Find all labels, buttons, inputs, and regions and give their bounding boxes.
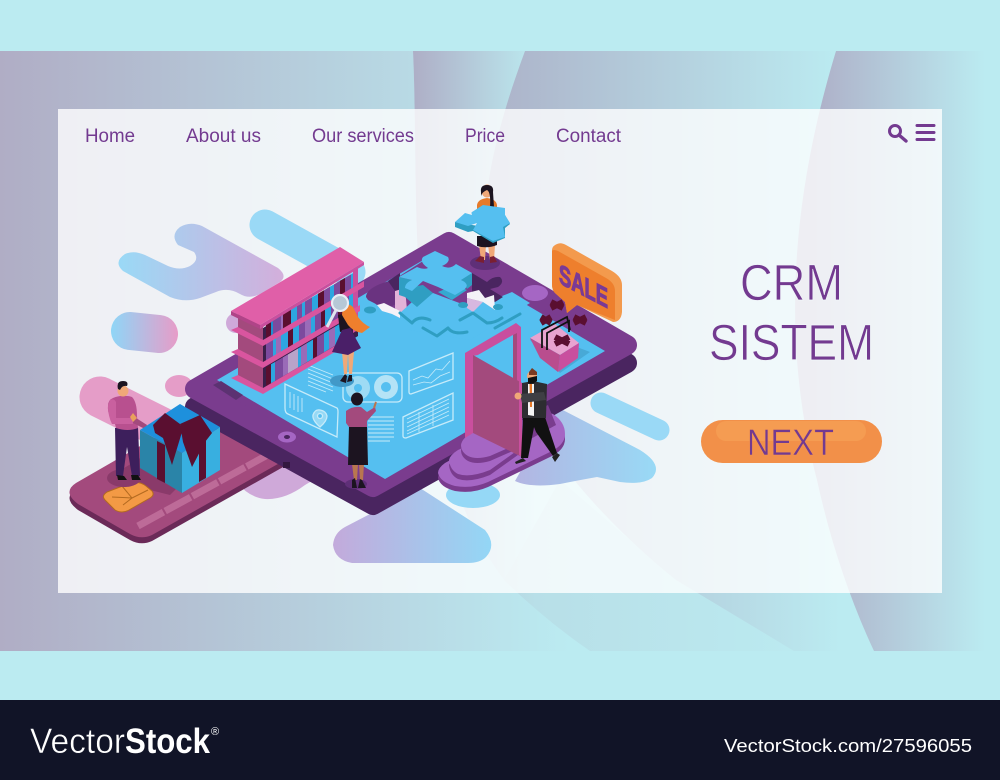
panel: landing page card xyxy=(58,109,942,593)
door panel xyxy=(473,355,522,457)
navigation menu: Home xyxy=(85,126,135,147)
purple left piece xyxy=(366,281,396,309)
tablet screen xyxy=(217,252,605,479)
image id: VectorStock.com/27596055 xyxy=(724,735,972,756)
basket interior xyxy=(530,324,579,355)
shelf side panel xyxy=(238,314,263,392)
missing piece floor xyxy=(367,252,512,313)
list lines xyxy=(368,417,394,441)
dark hole left xyxy=(388,273,400,291)
card slot xyxy=(283,462,290,468)
person: woman with magnifier xyxy=(327,295,370,387)
basket right wall xyxy=(558,343,579,372)
puzzle area xyxy=(364,251,548,340)
headline xyxy=(709,254,874,371)
puzzle seams xyxy=(400,313,520,336)
icon: search xyxy=(890,126,906,141)
person: man with gift xyxy=(107,381,147,487)
sale speech bubble xyxy=(552,243,622,322)
white strip xyxy=(377,303,400,318)
basket handles xyxy=(542,317,570,350)
person: woman with black skirt xyxy=(345,392,376,489)
shelf boards xyxy=(231,281,364,346)
navigation menu: Our services xyxy=(312,126,414,147)
basket item xyxy=(555,337,569,344)
gauges card xyxy=(343,373,402,402)
gift box xyxy=(140,404,220,493)
navigation menu: About us xyxy=(186,126,261,147)
navigation menu: Price xyxy=(465,126,505,147)
navigation menu: Contact xyxy=(556,126,622,147)
basket with crosses xyxy=(530,302,590,373)
books row 3 xyxy=(266,320,346,386)
raised piece side xyxy=(399,273,472,307)
pink wall xyxy=(395,288,407,315)
headline: CRM xyxy=(740,254,843,311)
decorative background blobs xyxy=(100,224,659,563)
ui circle xyxy=(522,285,548,301)
blue screen patches xyxy=(400,292,530,340)
card chip xyxy=(103,482,153,512)
shelf shadow xyxy=(213,381,243,400)
dark hole right xyxy=(472,273,503,302)
table card xyxy=(403,393,453,438)
footer bar xyxy=(0,700,1000,780)
navigation menu xyxy=(85,126,622,147)
puzzle slot shadows xyxy=(364,302,503,314)
sale label: SALE xyxy=(559,259,608,315)
chart card xyxy=(409,353,453,394)
door xyxy=(465,323,522,457)
carried puzzle piece xyxy=(455,205,510,243)
crosses xyxy=(541,302,586,323)
pink chip xyxy=(417,303,423,312)
next button xyxy=(701,420,882,463)
tablet body xyxy=(195,242,627,505)
vectorstock logo: ® xyxy=(211,726,219,738)
next label: NEXT xyxy=(747,422,834,463)
person: woman holding puzzle piece xyxy=(455,184,510,270)
basket left wall xyxy=(530,338,560,372)
vectorstock logo: Stock xyxy=(125,722,210,761)
gift bow xyxy=(153,413,212,467)
vectorstock logo xyxy=(30,722,219,761)
gift ribbon xyxy=(157,441,165,483)
map card xyxy=(285,384,338,437)
shelf top xyxy=(231,247,364,325)
white piece xyxy=(467,290,495,312)
vectorstock logo: Vector xyxy=(30,722,125,761)
credit card xyxy=(69,397,292,543)
headline: SISTEM xyxy=(709,314,874,371)
shelf right post xyxy=(353,266,358,333)
tablet button xyxy=(278,432,296,442)
card stripe xyxy=(138,452,273,526)
door frame xyxy=(465,323,521,438)
door steps xyxy=(438,405,565,492)
icon: menu xyxy=(917,126,934,140)
screen ui cards xyxy=(285,353,453,441)
shelf back xyxy=(263,272,358,393)
bookshelf xyxy=(231,247,364,394)
raised piece top xyxy=(399,251,472,295)
books row 2 xyxy=(266,292,353,361)
person: man in suit xyxy=(514,368,560,464)
text lines card xyxy=(308,365,333,392)
books row 1 xyxy=(266,271,357,339)
